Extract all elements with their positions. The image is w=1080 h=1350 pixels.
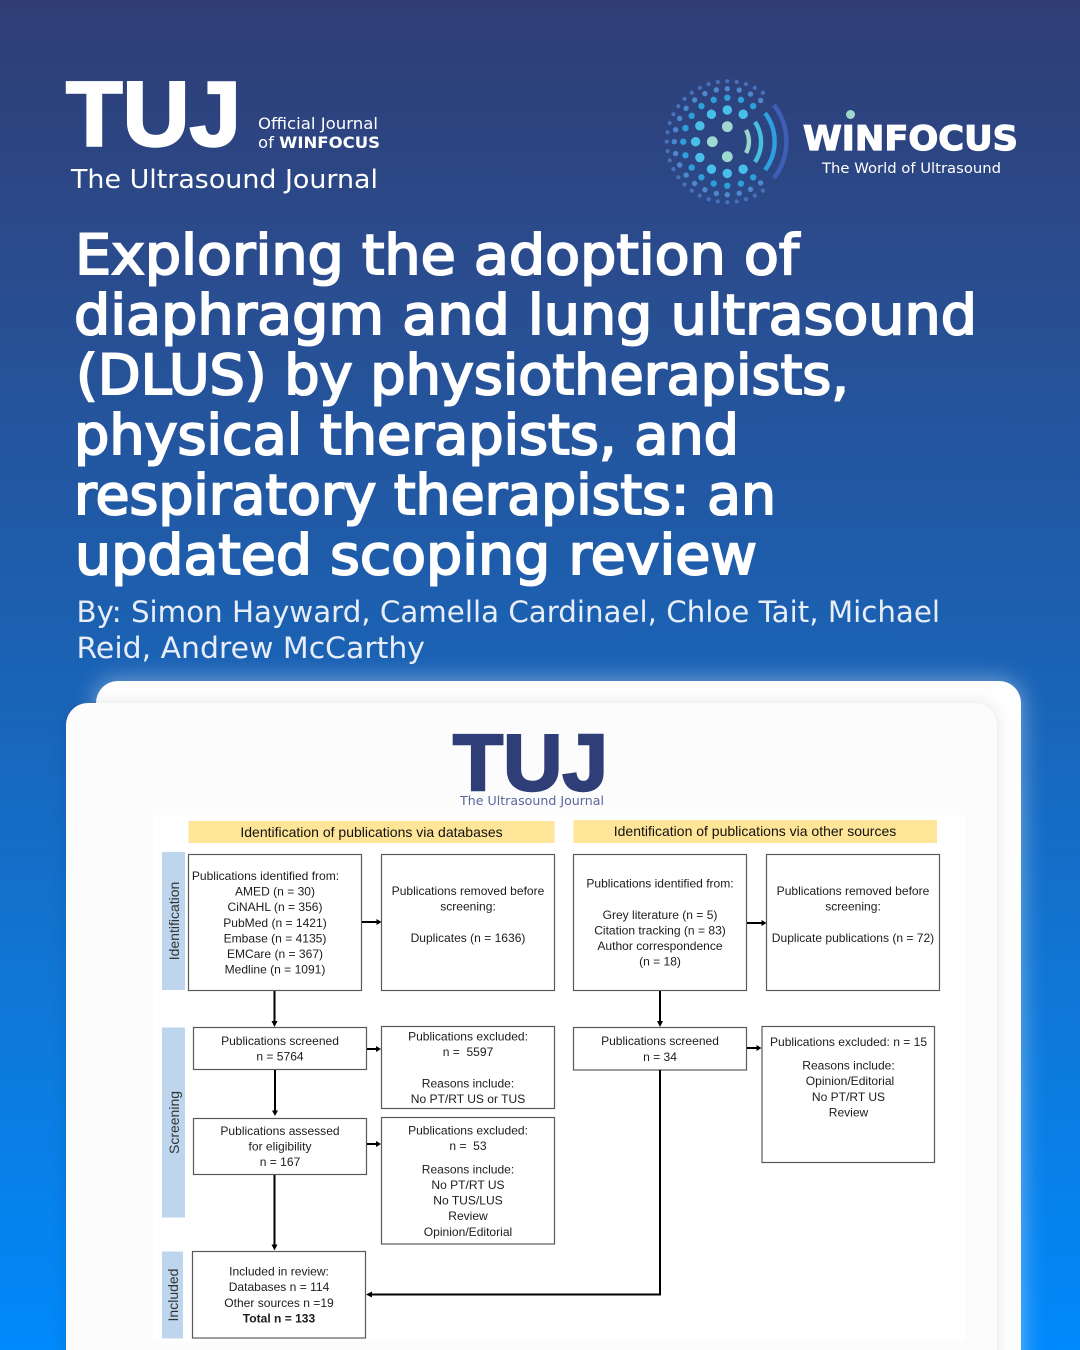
icon: ultrasound dot sphere: [665, 79, 766, 204]
logo: WINFOCUS: WINFOCUS: [803, 119, 1018, 159]
diagram background: [153, 815, 965, 1341]
stage: Identification: Identification: [166, 882, 182, 960]
arrow: identified to screened other: [657, 991, 663, 1027]
box: excluded 53: Review: [448, 1209, 488, 1223]
authors: Reid, Andrew McCarthy: [76, 631, 425, 665]
title: [74, 223, 977, 587]
header: other sources: [574, 820, 937, 843]
card logo: TUJ: TUJ: [453, 718, 608, 807]
title: updated scoping review: [75, 523, 757, 587]
box: assessed for eligibility: [194, 1118, 366, 1174]
box: excluded 5597: No PT/RT US or TUS: [411, 1092, 525, 1106]
title: diaphragm and lung ultrasound: [74, 283, 977, 347]
arrow: assessed to excluded 53: [367, 1141, 381, 1147]
box: publications screened databases: n = 5764: [256, 1050, 304, 1064]
box: excluded 53: [382, 1118, 554, 1244]
arrow: other sources to included: [366, 1070, 660, 1298]
box: excluded 5597: Publications excluded:: [408, 1030, 528, 1044]
box: publications identified other sources: [574, 854, 746, 990]
logo: WINFOCUS: [665, 79, 1018, 204]
arrow: identified to removed other: [747, 920, 766, 926]
authors: By: Simon Hayward, Camella Cardinael, Chloe Tait, Michael: [76, 595, 940, 629]
stage: Included: Included: [165, 1269, 181, 1321]
box: publications identified other sources: Publications identified from:: [586, 876, 734, 890]
box: removed before screening databases: Duplicates (n = 1636): [411, 931, 525, 945]
title: physical therapists, and: [74, 403, 739, 467]
logo: TUJ The Ultrasound Journal: of WINFOCUS: [258, 133, 380, 152]
box: assessed for eligibility: n = 167: [260, 1155, 301, 1169]
box: excluded 53: Reasons include:: [422, 1162, 514, 1176]
box: removed before screening other sources: screening:: [825, 900, 881, 914]
box: removed before screening databases: [382, 854, 554, 990]
box: publications identified from databases: [188, 854, 362, 990]
box: excluded 15: Opinion/Editorial: [806, 1074, 894, 1088]
box: removed before screening other sources: Publications removed before: [777, 884, 930, 898]
box: publications screened databases: Publications screened: [221, 1034, 339, 1048]
box: excluded 5597: n = 5597: [443, 1045, 494, 1059]
title: Exploring the adoption of: [75, 223, 801, 287]
arrow: screened to excluded 5597: [367, 1046, 381, 1052]
header: databases: Identification of publications via databases: [240, 824, 503, 840]
stage: Screening: Screening: [166, 1091, 182, 1154]
box: excluded 15: Review: [829, 1105, 869, 1119]
icon: sound wave arcs: [746, 105, 786, 178]
box: publications identified from databases: PubMed (n = 1421): [223, 916, 327, 930]
box: publications identified other sources: Grey literature (n = 5): [603, 908, 717, 922]
box: removed before screening other sources: Duplicate publications (n = 72): [772, 931, 934, 945]
back card: [96, 681, 1021, 1350]
logo: TUJ The Ultrasound Journal: [66, 64, 380, 195]
stage: Screening: [162, 1028, 185, 1218]
arrow: screened to assessed: [272, 1070, 278, 1116]
header: databases: [188, 821, 554, 843]
box: excluded 53: Publications excluded:: [408, 1124, 528, 1138]
box: publications identified other sources: Citation tracking (n = 83): [594, 923, 726, 937]
box: excluded 53: Opinion/Editorial: [424, 1225, 512, 1239]
header: other sources: Identification of publications via other sources: [614, 823, 896, 839]
front card: [66, 703, 997, 1350]
arrow: assessed to included: [272, 1175, 278, 1250]
flow diagram: [153, 815, 965, 1341]
box: excluded 53: No PT/RT US: [431, 1178, 505, 1192]
stage: Included: [162, 1252, 183, 1338]
arrow: identified to screened databases: [272, 991, 278, 1027]
box: excluded 15: [762, 1026, 934, 1162]
box: publications identified from databases: Publications identified from:: [192, 869, 339, 883]
box: publications screened other sources: [574, 1028, 746, 1070]
box: excluded 15: Reasons include:: [802, 1059, 895, 1073]
box: publications identified other sources: (n = 18): [639, 955, 681, 969]
card logo: TUJ: The Ultrasound Journal: [459, 793, 604, 808]
box: publications identified from databases: AMED (n = 30): [235, 885, 315, 899]
box: excluded 53: n = 53: [449, 1139, 487, 1153]
box: included in review: Total n = 133: [243, 1311, 316, 1325]
box: publications identified from databases: EMCare (n = 367): [227, 947, 323, 961]
arrow: screened to excluded 15: [747, 1045, 762, 1051]
logo: TUJ The Ultrasound Journal: The Ultrasound Journal: [70, 165, 378, 195]
box: assessed for eligibility: for eligibility: [249, 1140, 311, 1154]
box: removed before screening databases: screening:: [440, 900, 496, 914]
logo: TUJ The Ultrasound Journal: Official Journal: [258, 114, 378, 133]
box: publications identified from databases: CiNAHL (n = 356): [228, 900, 322, 914]
box: publications screened databases: [194, 1028, 366, 1070]
box: removed before screening databases: Publications removed before: [392, 884, 545, 898]
box: publications screened other sources: n = 34: [643, 1050, 677, 1064]
box: publications identified other sources: Author correspondence: [597, 939, 723, 953]
box: assessed for eligibility: Publications assessed: [220, 1124, 340, 1138]
box: excluded 15: No PT/RT US: [812, 1090, 885, 1104]
arrow: identified to removed databases: [362, 919, 382, 925]
box: excluded 53: No TUS/LUS: [433, 1194, 503, 1208]
box: included in review: Other sources n =19: [224, 1296, 334, 1310]
title: respiratory therapists: an: [74, 463, 776, 527]
box: publications identified from databases: Medline (n = 1091): [225, 963, 325, 977]
box: removed before screening other sources: [766, 854, 940, 990]
box: excluded 5597: Reasons include:: [422, 1076, 514, 1090]
box: included in review: Databases n = 114: [229, 1280, 330, 1294]
box: excluded 15: Publications excluded: n = 15: [770, 1035, 927, 1049]
logo: TUJ The Ultrasound Journal: TUJ: [66, 64, 241, 166]
box: excluded 5597: [382, 1026, 554, 1108]
box: included in review: Included in review:: [229, 1265, 329, 1279]
logo: WINFOCUS: The World of Ultrasound: [821, 161, 1001, 177]
icon: mint dot: [846, 110, 855, 119]
authors: [76, 595, 940, 665]
box: included in review: [192, 1252, 366, 1338]
box: publications identified from databases: Embase (n = 4135): [224, 931, 326, 945]
title: (DLUS) by physiotherapists,: [76, 343, 849, 407]
box: publications screened other sources: Publications screened: [601, 1034, 719, 1048]
stage: Identification: [162, 852, 185, 990]
